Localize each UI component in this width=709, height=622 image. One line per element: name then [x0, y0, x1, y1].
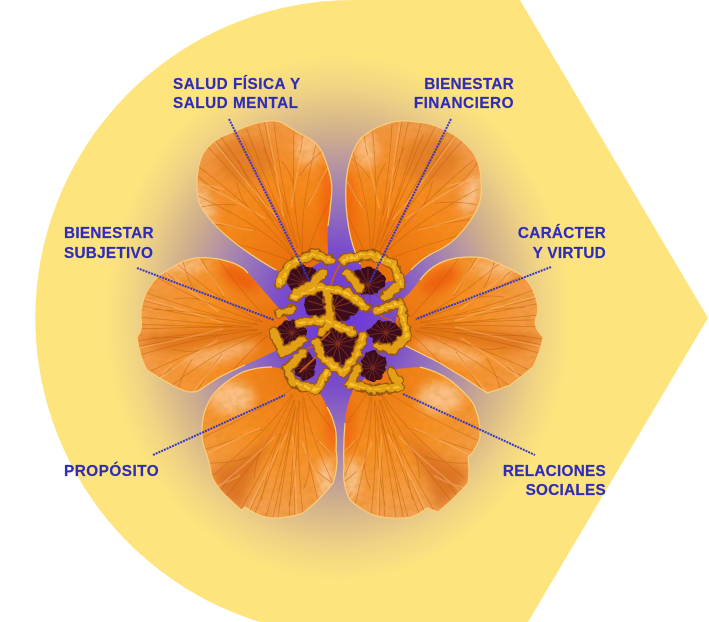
leader line: bienestar subjetivo — [137, 268, 274, 320]
petal: left — [136, 257, 289, 393]
flower — [136, 120, 544, 519]
label: bienestar financiero: BIENESTAR — [424, 76, 514, 93]
petal: top left — [196, 120, 332, 272]
leader line: propósito — [153, 395, 285, 455]
label: relaciones sociales: RELACIONES — [503, 463, 606, 480]
label: carácter y virtud: CARÁCTER — [518, 225, 606, 242]
label: relaciones sociales: SOCIALES — [526, 482, 606, 499]
stamens: dark throats — [277, 262, 402, 382]
label: propósito: PROPÓSITO — [64, 462, 159, 480]
label: carácter y virtud: Y VIRTUD — [533, 245, 606, 262]
label: bienestar subjetivo: BIENESTAR — [64, 225, 154, 242]
label: bienestar subjetivo: SUBJETIVO — [64, 245, 153, 262]
petal: top right — [345, 120, 482, 282]
leader line: salud física y salud mental — [229, 119, 310, 282]
leader line: relaciones sociales — [403, 394, 535, 455]
petal: bottom left — [201, 366, 338, 518]
petal: right — [396, 256, 544, 394]
label: salud física y salud mental: SALUD FÍSICA Y — [173, 76, 301, 93]
leader line: bienestar financiero — [370, 119, 451, 282]
label: salud física y salud mental: SALUD MENTAL — [173, 95, 299, 112]
petal: bottom right — [343, 366, 481, 519]
stamens: gold frilled rims — [274, 254, 407, 390]
label: bienestar financiero: FINANCIERO — [414, 95, 514, 112]
leader line: carácter y virtud — [416, 267, 551, 319]
